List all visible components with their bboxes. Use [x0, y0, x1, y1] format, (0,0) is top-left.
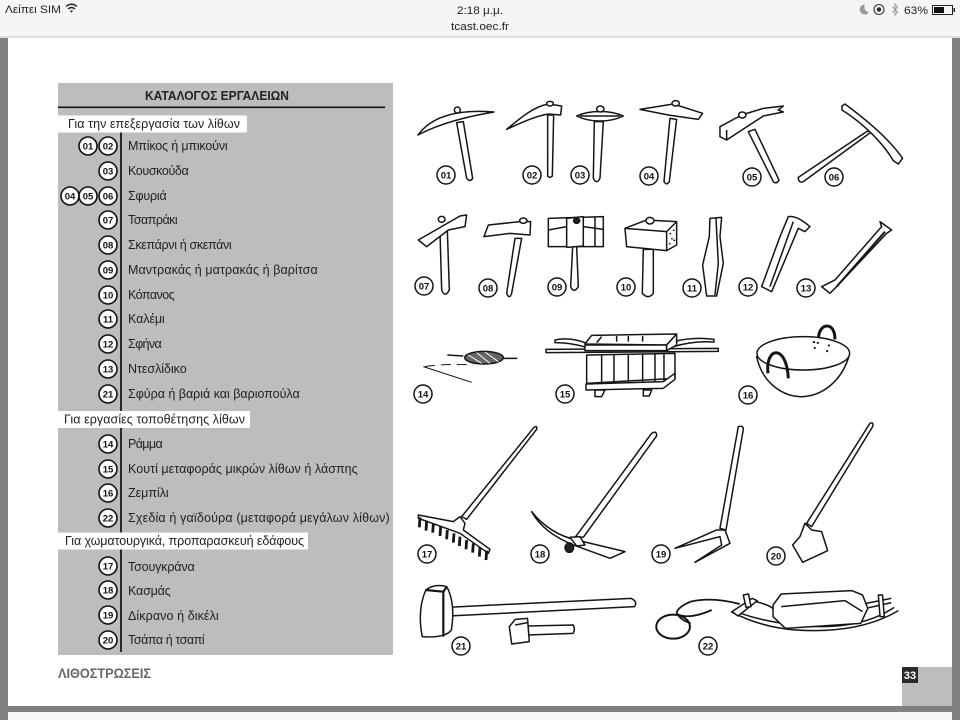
row 03: Κουσκούδα — [128, 164, 189, 178]
row 21 — [99, 385, 300, 403]
icon: adze 08: 08 — [483, 284, 493, 294]
icon: hammer 04: 04 — [644, 172, 655, 182]
icon: sled 22: 22 — [703, 642, 713, 652]
row 14: Ράμμα — [128, 437, 163, 451]
icon: mallet 10: 10 — [621, 282, 631, 294]
icon: chisel 11 — [683, 217, 723, 297]
icon: mallet 09 — [548, 217, 603, 296]
row 07: 07 — [103, 216, 113, 226]
icon: pick 01 — [418, 107, 494, 184]
category: stone working: Για την επεξεργασία των λίθων — [68, 117, 240, 131]
page number tab — [902, 667, 952, 706]
icon: chisel 11: 11 — [687, 284, 698, 294]
icon: chisel 13 — [797, 222, 892, 297]
row 04 05 06: Σφυριά — [128, 189, 167, 203]
row 04 05 06: 06 — [103, 192, 113, 202]
row 15: Κουτί μεταφοράς μικρών λίθων ή λάσπης — [128, 462, 358, 476]
category: stone laying: Για εργασίες τοποθέτησης λίθων — [64, 412, 245, 426]
icon: hammer 06: 06 — [829, 172, 839, 184]
row 08 — [99, 236, 232, 254]
row 16 — [99, 484, 169, 502]
row 03 — [99, 162, 189, 180]
row 19: 19 — [103, 610, 113, 622]
row 18: 18 — [103, 586, 113, 596]
icon: fork 19: 19 — [656, 550, 666, 560]
browser status bar: tcast.oec.fr — [451, 21, 509, 33]
row 14: 14 — [103, 440, 114, 450]
icon: hammer 03 — [571, 106, 623, 184]
row 19 — [99, 606, 219, 624]
row 10: Κόπανος — [128, 288, 175, 302]
icon: hammer 06 — [798, 104, 903, 186]
row 17: Τσουγκράνα — [128, 560, 195, 574]
row 22: Σχεδία ή γαϊδούρα (μεταφορά μεγάλων λίθων) — [128, 511, 390, 525]
row 11: 11 — [103, 314, 114, 326]
row 13: 13 — [103, 364, 113, 376]
row 13: Ντεσλίδικο — [128, 362, 187, 376]
icon: hammer 05 — [720, 106, 783, 186]
browser status bar — [0, 0, 960, 38]
icon: sled 22 — [656, 591, 898, 655]
icon: mattock 18: 18 — [535, 550, 545, 560]
icon: pick 01: 01 — [441, 170, 452, 182]
browser status bar: Λείπει SIM — [5, 4, 61, 16]
row 01 02: 01 — [83, 142, 94, 152]
category: earthworks: Για χωματουργικά, προπαρασκευή εδάφους — [65, 534, 304, 548]
row 09 — [99, 261, 318, 279]
row 18 — [99, 581, 171, 599]
icon: rake 17 — [418, 427, 537, 563]
row 18: Κασμάς — [128, 584, 171, 598]
icon: rake 17: 17 — [422, 550, 432, 560]
page number tab: 33 — [904, 670, 916, 682]
row 12: Σφήνα — [128, 337, 162, 351]
row 17: 17 — [103, 562, 113, 572]
icon: wedge 12: 12 — [743, 282, 753, 294]
icon: mattock 18 — [531, 432, 657, 563]
row 17 — [99, 557, 195, 575]
browser status bar: 2:18 μ.μ. — [457, 5, 503, 17]
icon: hammer 07: 07 — [419, 282, 429, 292]
row 04 05 06: 05 — [83, 192, 94, 202]
icon: fork 19 — [652, 426, 743, 563]
row 15: 15 — [103, 464, 114, 476]
icon: hammer 05: 05 — [747, 172, 758, 184]
icon: carrying box 15: 15 — [560, 390, 571, 400]
row 08: 08 — [103, 240, 113, 252]
row 21: 21 — [103, 390, 114, 400]
row 11: Καλέμι — [128, 312, 165, 326]
row 04 05 06 — [61, 187, 167, 205]
row 10 — [99, 286, 175, 304]
heading: catalogue title: ΚΑΤΑΛΟΓΟΣ ΕΡΓΑΛΕΙΩΝ — [145, 89, 289, 103]
icon: sledgehammers 21: 21 — [456, 642, 467, 652]
icon: pick 02 — [507, 101, 562, 184]
icon: hammer 04 — [640, 101, 703, 185]
row 19: Δίκρανο ή δικέλι — [128, 609, 219, 623]
footer: section name: ΛΙΘΟΣΤΡΩΣΕΙΣ — [58, 666, 151, 681]
icon: mallet 10 — [617, 217, 677, 297]
row 22: 22 — [103, 514, 113, 524]
icon: basket 16: 16 — [743, 390, 753, 402]
row 07 — [99, 211, 178, 229]
row 09: 09 — [103, 266, 113, 276]
browser status bar: 63% — [904, 5, 928, 17]
row 16: Ζεμπίλι — [128, 486, 169, 500]
row 20 — [99, 631, 205, 649]
icon: adze 08 — [479, 218, 531, 297]
row 20: 20 — [103, 636, 113, 646]
row 14 — [99, 435, 163, 453]
row 07: Τσαπράκι — [128, 213, 178, 227]
row 16: 16 — [103, 488, 113, 500]
icon: hammer 03: 03 — [575, 170, 585, 182]
row 10: 10 — [103, 290, 113, 302]
icon: string line 14 — [414, 351, 517, 403]
row 04 05 06: 04 — [65, 192, 76, 202]
panel: tool catalogue — [58, 83, 393, 655]
row 03: 03 — [103, 166, 113, 178]
icon: string line 14: 14 — [418, 390, 429, 400]
icon: mallet 09: 09 — [552, 282, 562, 294]
icon: hoe 20: 20 — [771, 552, 781, 562]
row 20: Τσάπα ή τσαπί — [128, 633, 205, 647]
icon: hammer 07 — [415, 215, 467, 295]
row 12: 12 — [103, 340, 113, 350]
row 15 — [99, 460, 358, 478]
icon: carrying box 15 — [546, 334, 718, 403]
icon: sledgehammers 21 — [420, 586, 636, 655]
icon: hoe 20 — [767, 423, 873, 565]
row 12 — [99, 335, 162, 353]
row 09: Μαντρακάς ή ματρακάς ή βαρίτσα — [128, 263, 318, 277]
icon: pick 02: 02 — [527, 170, 537, 182]
row 01 02 — [79, 137, 228, 155]
icon: wedge 12 — [739, 216, 810, 296]
row 13 — [99, 360, 187, 378]
icon: chisel 13: 13 — [801, 284, 811, 294]
row 01 02: 02 — [103, 142, 113, 152]
row 21: Σφύρα ή βαριά και βαριοπούλα — [128, 387, 300, 401]
row 01 02: Μπίκος ή μπικούνι — [128, 139, 228, 153]
icon: basket 16 — [739, 326, 850, 404]
row 11 — [99, 310, 165, 328]
row 08: Σκεπάρνι ή σκεπάνι — [128, 238, 232, 252]
